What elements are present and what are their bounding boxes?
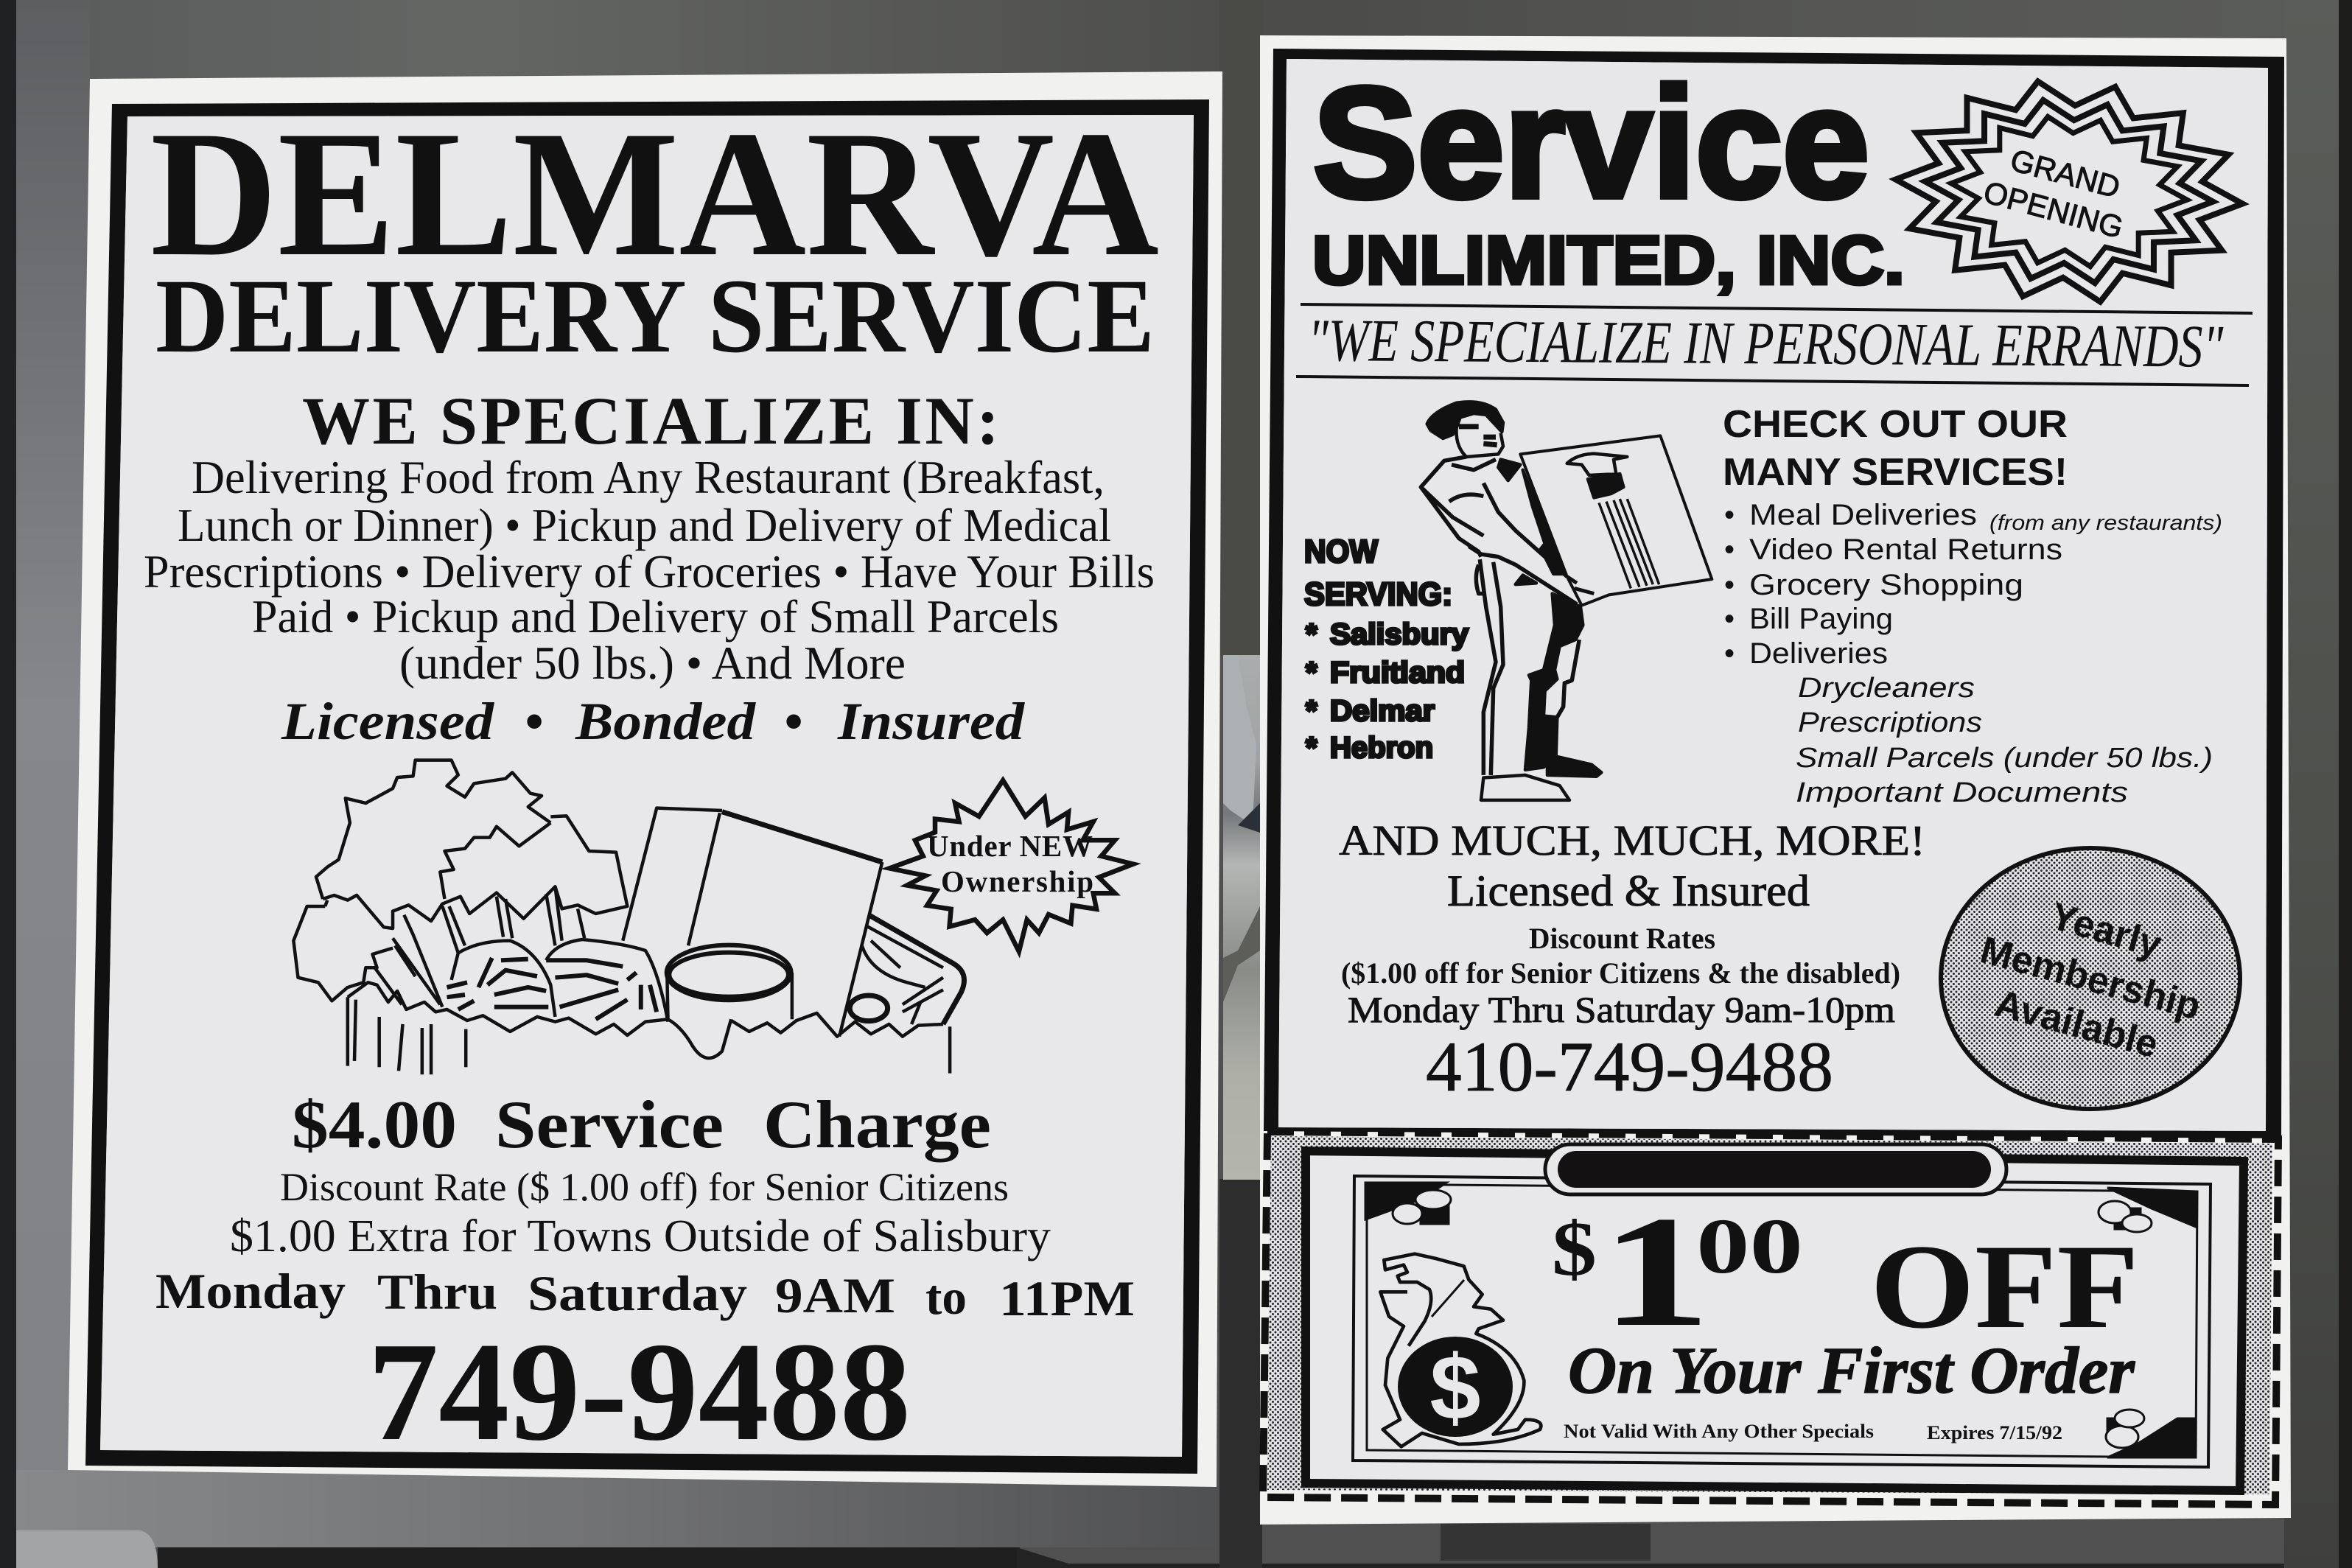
text: opening hours: Monday: [155, 1263, 346, 1319]
callout: under new ownership starburst: Under NEW: [927, 829, 1093, 863]
list: services: •: [1724, 637, 1735, 670]
text block: service area: SERVING:: [1304, 576, 1452, 612]
heading: service charge: $4.00: [292, 1087, 457, 1162]
text block: service area: [1304, 533, 1469, 764]
text block: service area: Salisbury: [1330, 618, 1469, 651]
coupon dotted band: [1267, 1136, 2272, 1494]
text: opening hours: 11PM: [999, 1270, 1135, 1326]
heading: service charge: Service: [495, 1087, 724, 1162]
heading: service charge: [292, 1087, 991, 1162]
icon: grand opening starburst: OPENING: [1980, 175, 2127, 245]
text: opening hours: Thru: [377, 1264, 497, 1320]
icon: grocery bag illustration: [293, 760, 965, 1074]
gap between cards: [1219, 0, 1262, 656]
text block: contact details: AND MUCH, MUCH, MORE!: [1339, 816, 1925, 864]
text block: service area: *: [1306, 732, 1317, 764]
black frame: [1264, 49, 2284, 1138]
text: licensed bonded insured: Bonded: [575, 692, 756, 751]
redacted pill: [1545, 1144, 2006, 1194]
list: services: Deliveries: [1749, 637, 1888, 670]
text: opening hours: to: [925, 1269, 967, 1325]
text block: services list: [144, 451, 1155, 689]
text: licensed bonded insured: [281, 692, 1025, 751]
title: Service: Service: [1313, 55, 1869, 231]
callout: yearly membership circle: [1941, 848, 2240, 1109]
text: opening hours: Saturday: [528, 1265, 747, 1321]
list: services: •: [1724, 569, 1735, 601]
phone number: 749-9488: [368, 1313, 911, 1470]
heading: check out our many services: MANY SERVICES!: [1723, 451, 2068, 494]
panel: Delmarva Delivery Service ad: [68, 71, 1222, 1487]
text: opening hours: 9AM: [775, 1267, 895, 1323]
callout: yearly membership circle: Membership: [1976, 928, 2205, 1029]
heading: check out our many services: CHECK OUT OUR: [1723, 403, 2068, 446]
list: services: Grocery Shopping: [1749, 569, 2023, 601]
text: opening hours: [155, 1263, 1135, 1326]
text: licensed bonded insured: Licensed: [281, 692, 494, 751]
panel: Service Unlimited ad: [1260, 35, 2291, 1525]
text: licensed bonded insured: •: [784, 692, 802, 751]
callout: under new ownership starburst: [889, 780, 1133, 951]
icon: delivery man carrying a box: [1421, 402, 1712, 800]
list: services: •: [1724, 533, 1735, 566]
text block: services list: Prescriptions • Delivery of Groceries • Have Your Bills: [144, 545, 1155, 598]
black frame: [85, 99, 1209, 1474]
text block: contact details: Licensed & Insured: [1447, 867, 1810, 915]
list: services: Meal Deliveries: [1749, 499, 1977, 531]
list: services: [1724, 499, 2222, 808]
list: services: Important Documents: [1796, 777, 2128, 808]
text: extra for towns: $1.00 Extra for Towns Outside of Salisbury: [230, 1211, 1051, 1261]
text block: service area: NOW: [1304, 533, 1378, 570]
coupon text: on your first order: On Your First Order: [1568, 1334, 2135, 1407]
list: services: Bill Paying: [1749, 603, 1893, 635]
list: services: Prescriptions: [1798, 707, 1982, 738]
callout: yearly membership circle: Available: [1990, 982, 2163, 1066]
icon: money bag with dollar sign: [1380, 1254, 1541, 1446]
icon: grand opening starburst: GRAND: [2007, 142, 2124, 205]
text block: service area: *: [1306, 618, 1317, 651]
coupon fine print: [1564, 1421, 2062, 1443]
coupon amount: $1.00 off: $: [1552, 1205, 1597, 1292]
text block: contact details: ($1.00 off for Senior Citizens & the disabled): [1341, 956, 1900, 990]
coupon corner ornaments: [1365, 1183, 2197, 1457]
list: services: (from any restaurants): [1989, 511, 2222, 535]
text: licensed bonded insured: Insured: [837, 692, 1025, 751]
heading: Unlimited, Inc.: UNLIMITED, INC.: [1312, 222, 1905, 298]
text: licensed bonded insured: •: [525, 692, 543, 751]
coupon amount: $1.00 off: [1552, 1183, 2139, 1359]
card paper: [1260, 35, 2291, 1525]
coupon frame: [1306, 1151, 2244, 1491]
card paper: [68, 71, 1222, 1487]
coupon amount: $1.00 off: OFF: [1870, 1220, 2139, 1354]
text block: services list: Lunch or Dinner) • Pickup and Delivery of Medical: [178, 499, 1111, 551]
list: services: Small Parcels (under 50 lbs.): [1796, 743, 2213, 774]
text block: services list: (under 50 lbs.) • And More: [399, 637, 906, 689]
text: senior discount: Discount Rate ($ 1.00 off) for Senior Citizens: [280, 1165, 1009, 1209]
text block: contact details: Discount Rates: [1529, 922, 1715, 955]
text block: service area: *: [1306, 657, 1317, 689]
title: DELMARVA: DELMARVA: [150, 94, 1159, 293]
heading: check out our many services: [1723, 403, 2068, 494]
icon: grand opening starburst: [1888, 72, 2250, 311]
coupon fine print: Not Valid With Any Other Specials: [1564, 1421, 1874, 1442]
coupon amount: $1.00 off: 1: [1600, 1183, 1711, 1359]
text block: service area: Delmar: [1330, 695, 1435, 727]
coupon amount: $1.00 off: 00: [1696, 1203, 1803, 1290]
callout: yearly membership circle: Yearly: [2045, 895, 2166, 967]
coupon dashed border: [1263, 1132, 2278, 1505]
heading: service charge: Charge: [763, 1087, 991, 1162]
text block: contact details: Monday Thru Saturday 9am-10pm: [1348, 989, 1895, 1030]
heading: Delivery Service: DELIVERY SERVICE: [155, 258, 1155, 375]
list: services: •: [1724, 603, 1735, 635]
icon: money bag with dollar sign: $: [1430, 1337, 1480, 1439]
coupon: one dollar off: [1263, 1132, 2278, 1505]
coupon inner double border: [1353, 1176, 2211, 1467]
phone number: 410-749-9488: [1426, 1027, 1833, 1106]
text block: services list: Delivering Food from Any Restaurant (Breakfast,: [192, 451, 1105, 503]
callout: under new ownership starburst: Ownership: [941, 864, 1093, 898]
text block: service area: Fruitland: [1330, 657, 1465, 689]
text block: contact details: [1339, 816, 1925, 1030]
coupon fine print: Expires 7/15/92: [1927, 1422, 2062, 1443]
text block: service area: *: [1306, 695, 1317, 727]
text block: services list: Paid • Pickup and Delivery of Small Parcels: [252, 590, 1059, 643]
list: services: •: [1724, 499, 1735, 531]
heading: We specialize in: WE SPECIALIZE IN:: [302, 383, 999, 458]
text block: service area: Hebron: [1330, 732, 1433, 764]
list: services: Video Rental Returns: [1749, 533, 2062, 566]
list: services: Drycleaners: [1798, 673, 1975, 704]
